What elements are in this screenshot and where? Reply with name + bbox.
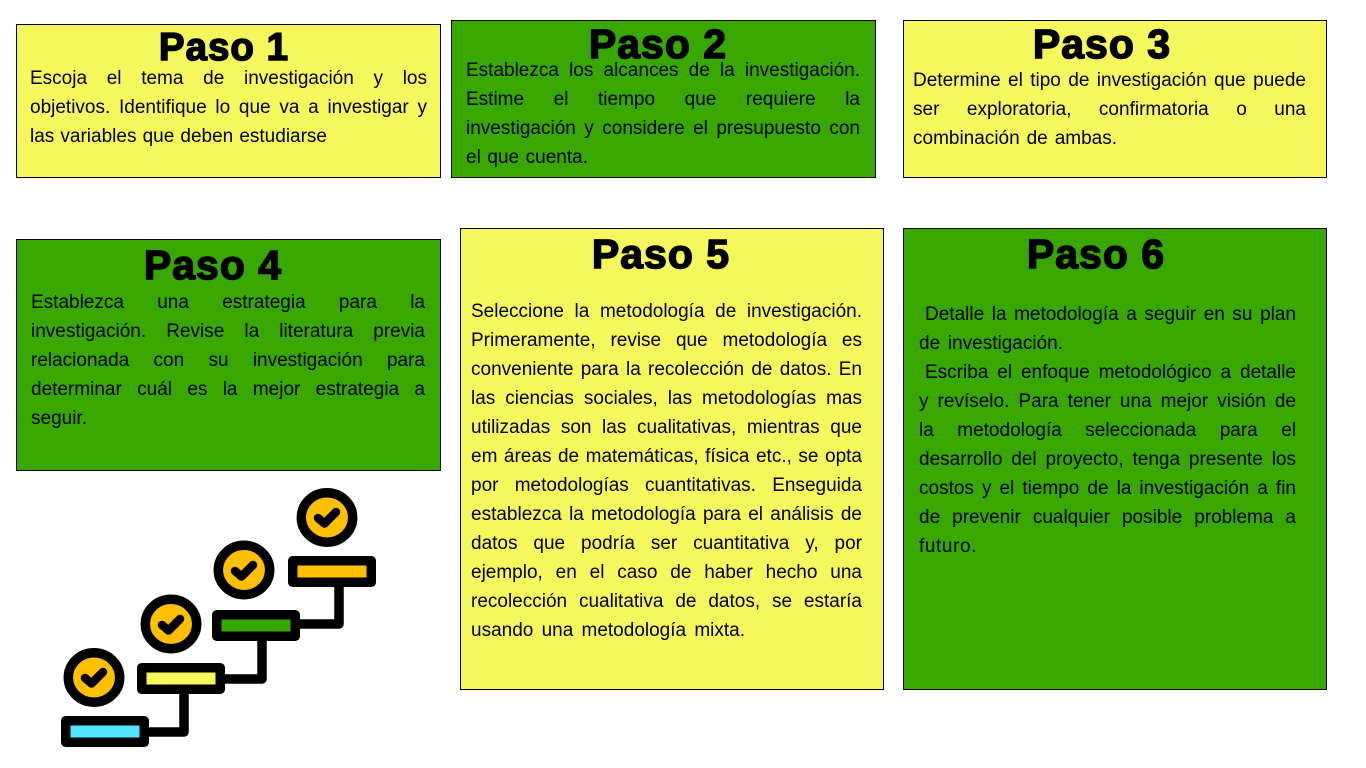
panel: Paso 1 [16,24,441,178]
text block: Paso 3: Determine el tipo de investigación que puede [913,70,1306,91]
text block: Paso 4: seguir. [31,408,87,428]
text block: Paso 3 [913,70,1306,149]
panel: Paso 4 [16,239,441,471]
heading: Paso 6: Paso 6 [1027,231,1165,277]
text block: Paso 6: la metodología seleccionada para el [919,420,1296,440]
panel: Paso 3 [903,20,1327,178]
text block: Paso 6: de investigación. [919,332,1063,354]
text block: Paso 5: utilizadas son las cualitativas, mientras que [471,416,862,438]
text block: Paso 5: em áreas de matemáticas, física etc., se opta [471,446,862,466]
text block: Paso 2 [466,60,860,168]
text block: Paso 4: determinar cuál es la mejor estrategia a [31,378,425,400]
text block: Paso 5: conveniente para la recolección de datos. En [471,358,862,380]
text block: Paso 5: recolección cualitativa de datos, se estaría [471,590,862,612]
text block: Paso 5: las ciencias sociales, las metodologías mas [471,388,862,408]
text block: Paso 4: investigación. Revise la literatura previa [31,320,425,342]
text block: Paso 6: futuro. [919,536,977,556]
text block: Paso 6 [919,304,1296,556]
text block: Paso 5: Seleccione la metodología de investigación. [471,300,862,322]
text block: Paso 2: investigación y considere el presupuesto con [466,118,860,139]
text block: Paso 5: datos que podría ser cuantitativa y, por [471,532,862,554]
text block: Paso 5: ejemplo, en el caso de haber hecho una [471,562,862,582]
heading: Paso 1: Paso 1 [159,26,289,69]
panel: Paso 5 [460,228,884,690]
text block: Paso 1: objetivos. Identifique lo que va a investigar y [30,96,427,118]
text block: Paso 5: usando una metodología mixta. [471,620,745,640]
text block: Paso 6: de prevenir cualquier posible problema a [919,506,1296,528]
text block: Paso 4 [31,292,425,428]
text block: Paso 6: costos y el tiempo de la investigación a fin [919,478,1296,498]
text block: Paso 2: Establezca los alcances de la investigación. [466,60,860,81]
heading: Paso 2: Paso 2 [589,21,727,67]
text block: Paso 5: Primeramente, revise que metodología es [471,330,862,350]
text block: Paso 2: el que cuenta. [466,147,588,168]
text block: Paso 4: Establezca una estrategia para la [31,292,425,312]
text block: Paso 6: Escriba el enfoque metodológico a detalle [925,362,1296,382]
text block: Paso 6: desarrollo del proyecto, tenga presente los [919,448,1296,470]
text block: Paso 5 [471,300,862,640]
text block: Paso 5: establezca la metodología para el análisis de [471,504,862,524]
heading: Paso 4: Paso 4 [144,242,282,288]
heading: Paso 5: Paso 5 [592,231,730,277]
text block: Paso 5: por metodologías cuantitativas. Enseguida [471,474,862,496]
icon: staircase of checked steps [61,488,376,747]
text block: Paso 6: y revíselo. Para tener una mejor visión de [919,390,1296,412]
text block: Paso 3: ser exploratoria, confirmatoria o una [913,99,1306,120]
text block: Paso 3: combinación de ambas. [913,128,1117,149]
heading: Paso 3: Paso 3 [1033,21,1171,67]
text block: Paso 4: relacionada con su investigación para [31,350,425,370]
text block: Paso 1: las variables que deben estudiarse [30,126,327,146]
text block: Paso 6: Detalle la metodología a seguir en su plan [925,304,1296,324]
panel: Paso 6 [903,228,1327,690]
text block: Paso 1 [30,68,427,146]
text block: Paso 1: Escoja el tema de investigación y los [30,68,427,88]
text block: Paso 2: Estime el tiempo que requiere la [466,89,860,110]
panel: Paso 2 [451,20,876,178]
